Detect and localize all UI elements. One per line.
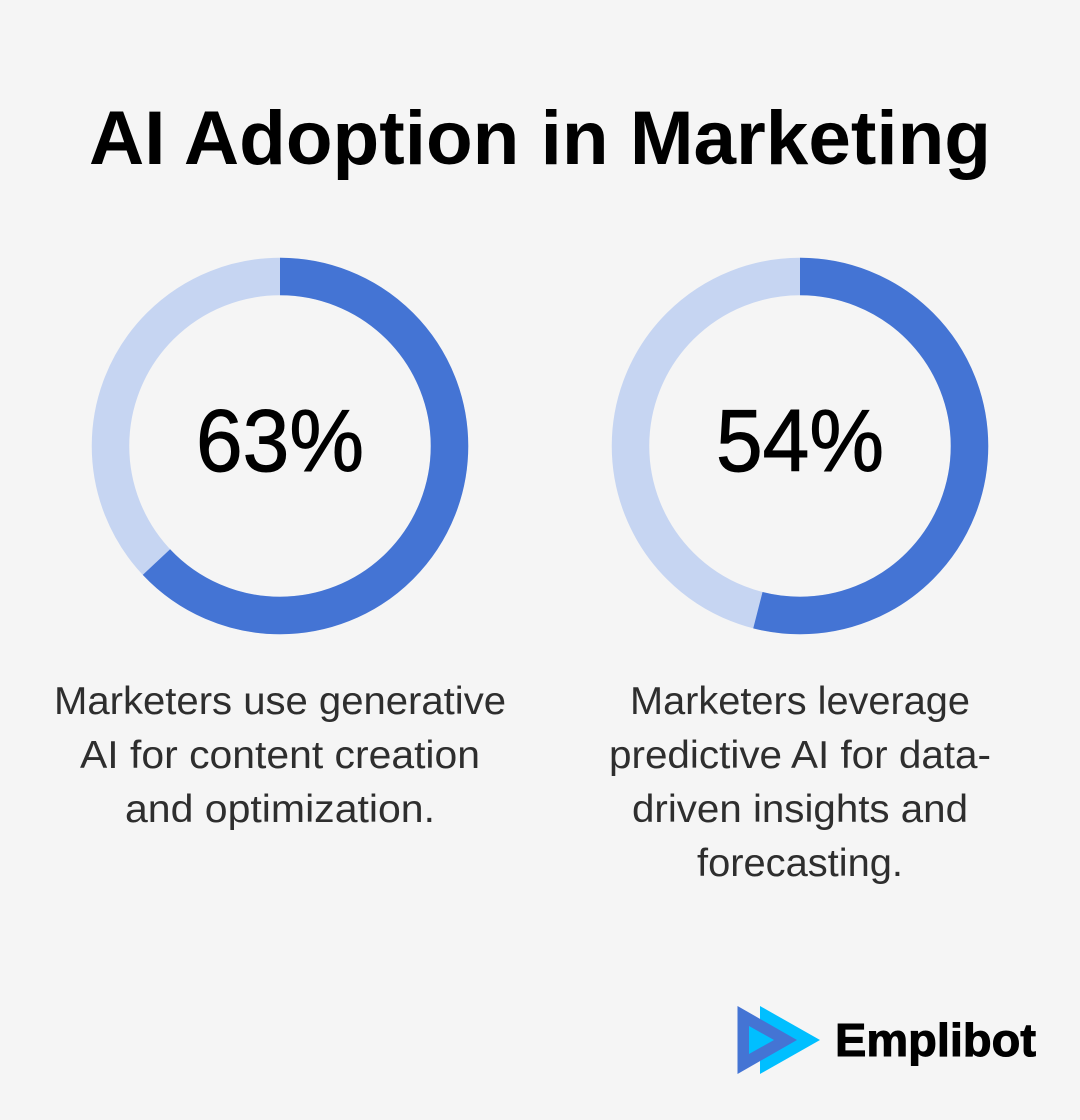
description: generative AI — [54, 680, 506, 831]
donut chart: 54% — [630, 276, 970, 616]
description: generative AI: AI for content creation — [80, 734, 480, 777]
description: predictive AI: predictive AI for data- — [609, 734, 991, 777]
icon: play triangles — [738, 1006, 820, 1074]
panel: generative AI stat — [54, 276, 506, 831]
donut chart: 63% — [110, 276, 450, 616]
wordmark: Emplibot — [835, 1014, 1036, 1066]
value: 63%: 63% — [196, 391, 364, 490]
description: generative AI: and optimization. — [125, 788, 435, 831]
logo: Emplibot — [738, 1006, 1036, 1074]
panel: predictive AI stat — [609, 276, 991, 885]
description: predictive AI: driven insights and — [632, 788, 968, 831]
description: predictive AI: Marketers leverage — [630, 680, 970, 723]
title: AI Adoption in Marketing — [89, 96, 991, 181]
description: generative AI: Marketers use generative — [54, 680, 506, 723]
description: predictive AI — [609, 680, 991, 885]
description: predictive AI: forecasting. — [697, 842, 903, 885]
value: 54%: 54% — [716, 391, 884, 490]
